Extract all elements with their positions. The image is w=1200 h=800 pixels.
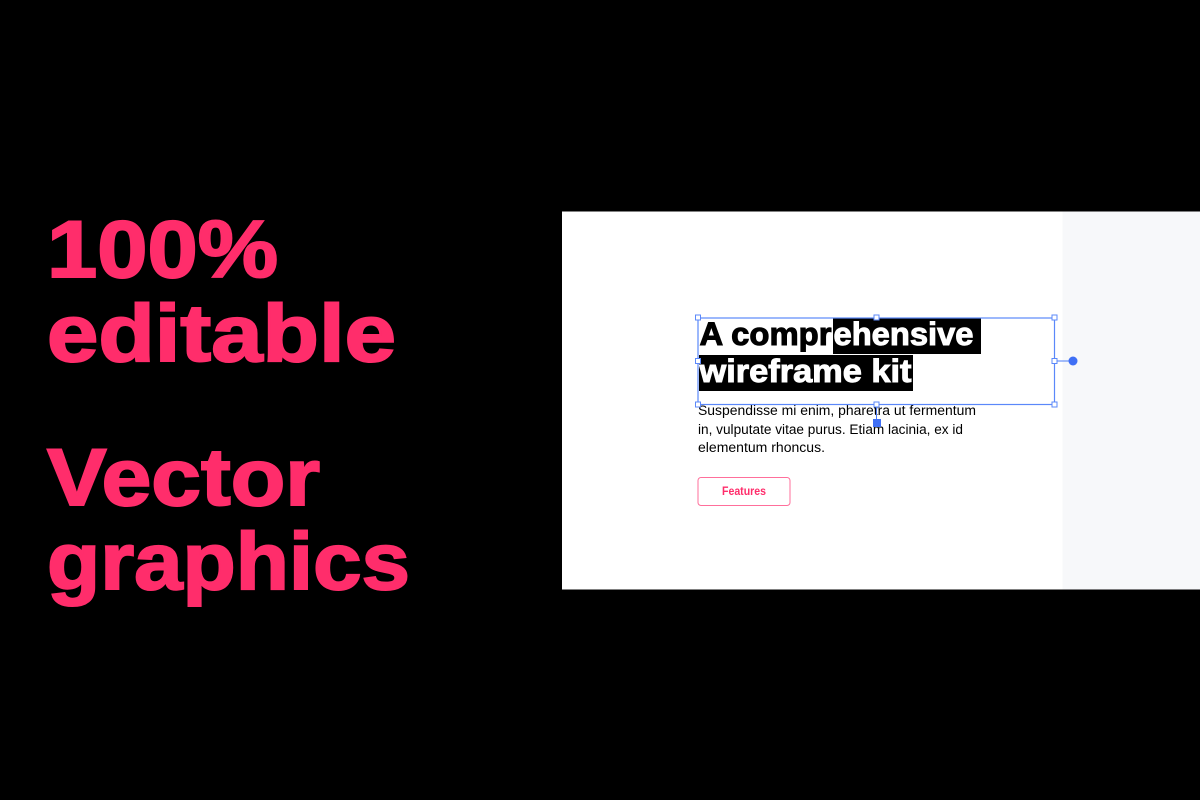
heading: 100% editable <box>47 205 396 379</box>
headline: A comprehensive wireframe kit: A compr <box>700 316 832 352</box>
heading: Vector graphics <box>47 433 410 607</box>
heading: Vector graphics: Vector <box>47 433 320 523</box>
heading: 100% editable: 100% <box>47 205 278 295</box>
text selection highlights <box>699 318 981 391</box>
headline: A comprehensive wireframe kit <box>698 316 974 389</box>
heading: Vector graphics: graphics <box>47 517 410 607</box>
body text: in, vulputate vitae purus. Etiam lacinia, ex id <box>698 422 963 437</box>
button: Features <box>698 478 790 506</box>
headline: A comprehensive wireframe kit: ehensive <box>834 316 974 352</box>
selection box with handles <box>696 315 1078 427</box>
body text: elementum rhoncus. <box>698 440 825 455</box>
side column <box>1062 212 1200 590</box>
body text <box>698 403 976 455</box>
panel: wireframe preview <box>562 212 1200 590</box>
body text: Suspendisse mi enim, pharetra ut fermentum <box>698 403 976 418</box>
heading: 100% editable: editable <box>47 289 396 379</box>
button: Features: Features <box>722 484 766 498</box>
headline: A comprehensive wireframe kit: wireframe kit <box>698 353 912 389</box>
